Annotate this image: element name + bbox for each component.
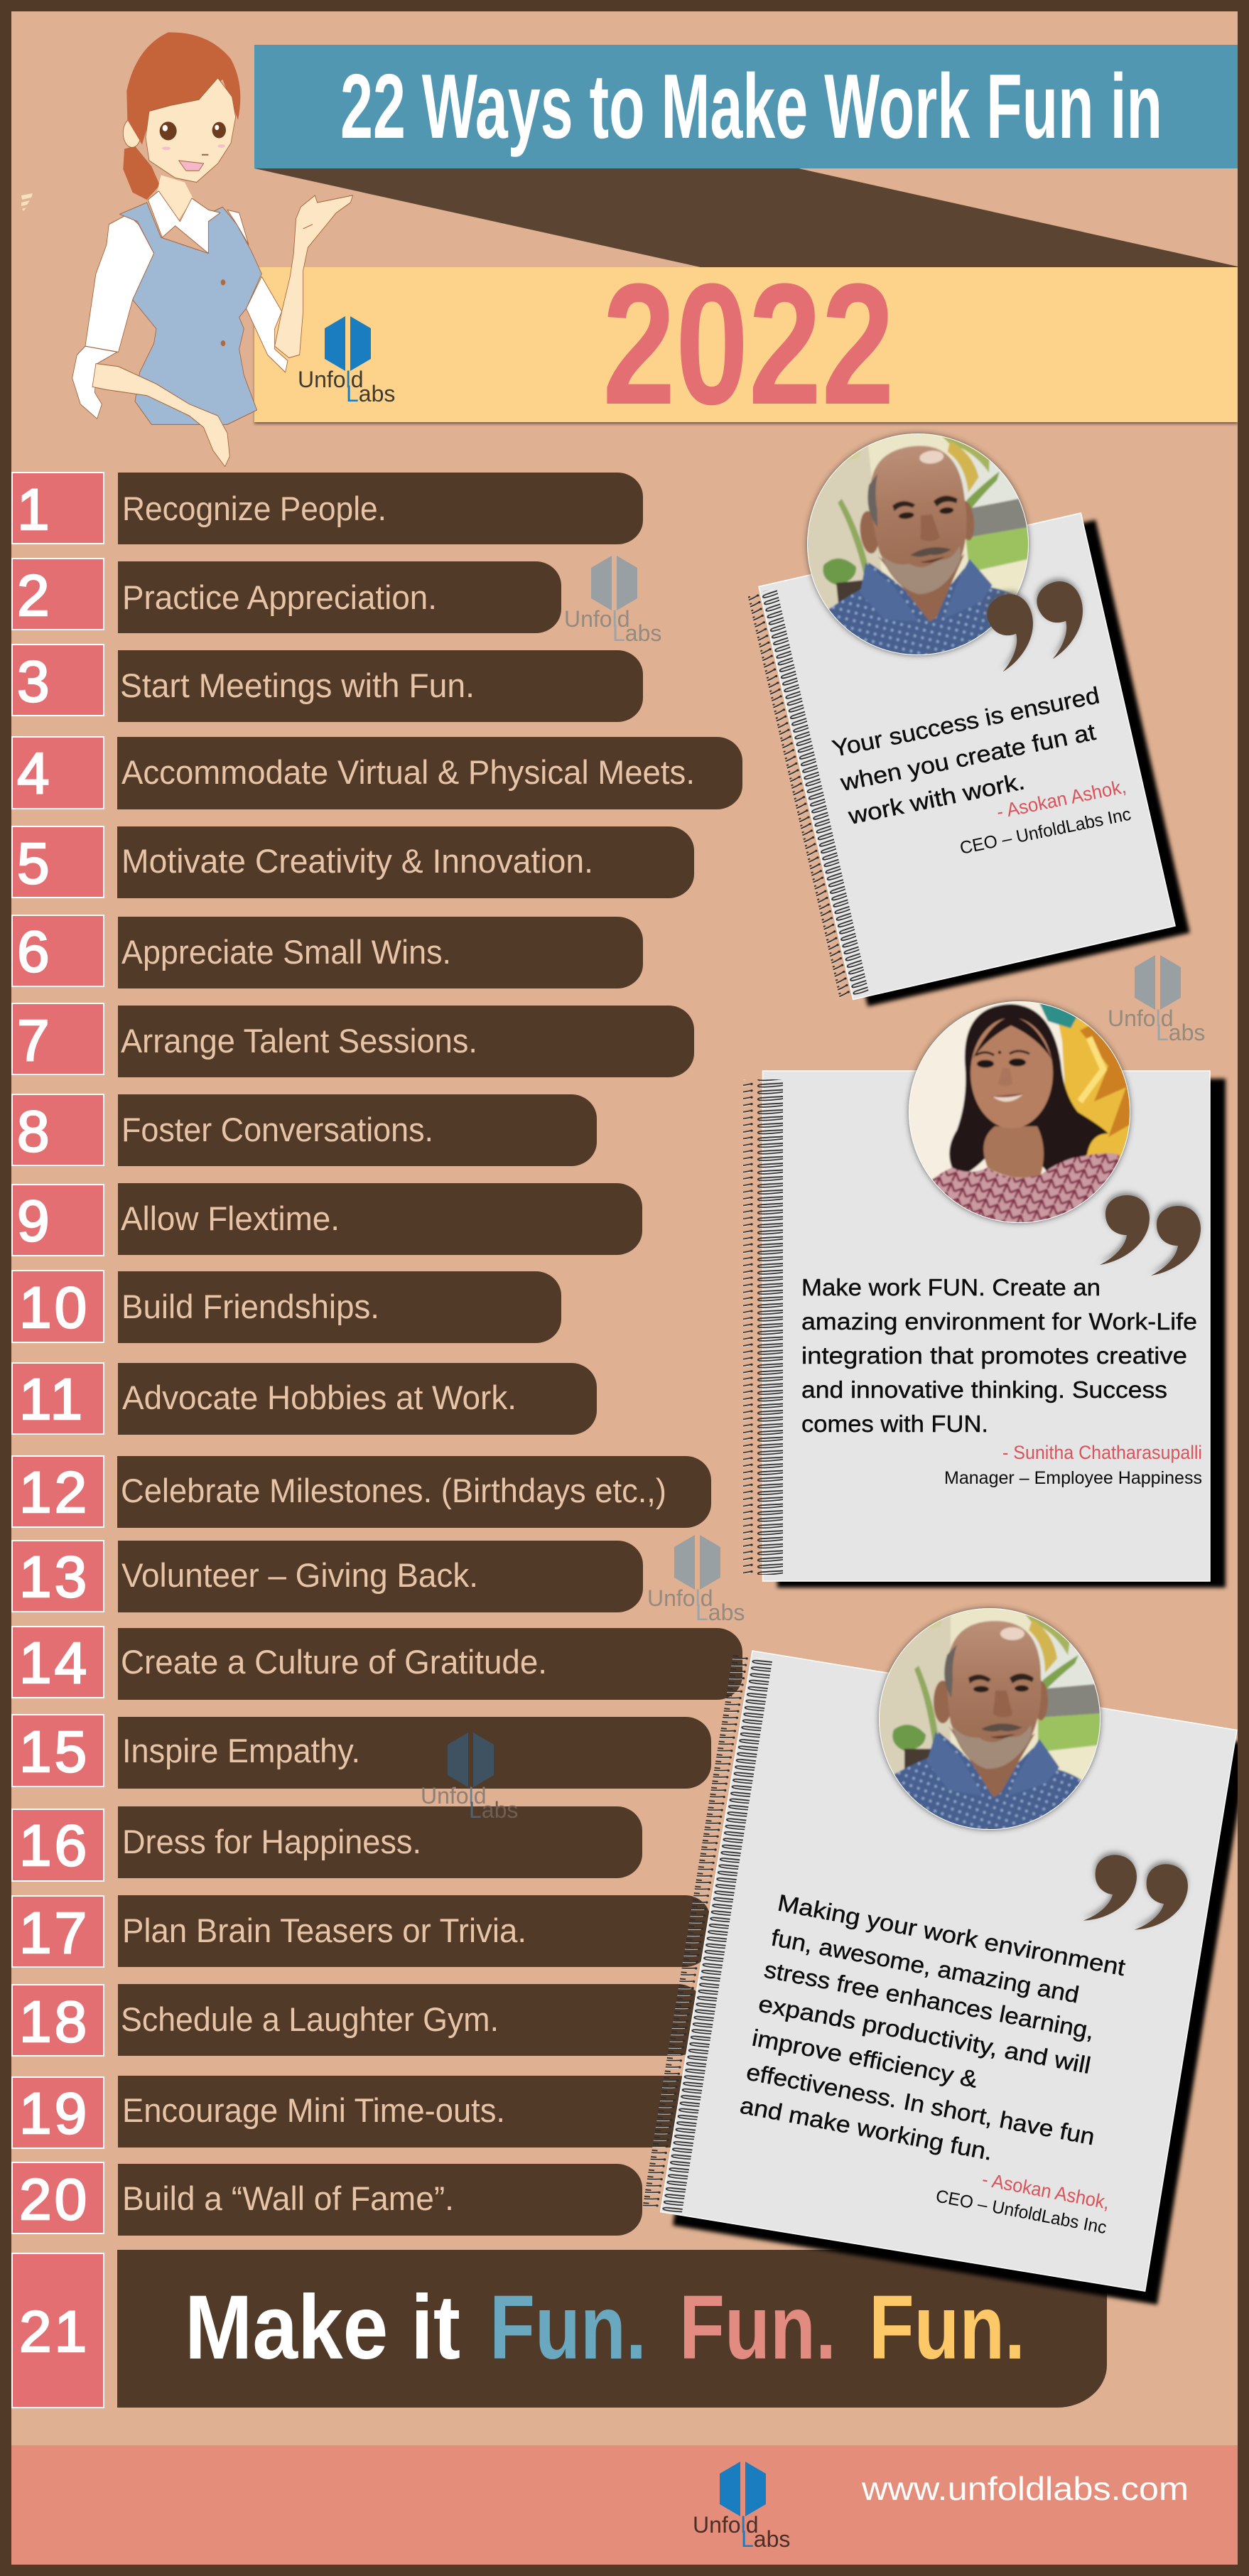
logo: header: Labs <box>346 381 395 406</box>
list item 20: 20 <box>19 2167 90 2232</box>
quote text: - Asokan Ashok, <box>995 776 1128 823</box>
notebook 1: Asokan quote <box>746 419 1190 1012</box>
logo: watermark beside item 2: Labs <box>612 620 661 646</box>
list item 21: make it fun: Fun. <box>679 2277 836 2378</box>
illustration: woman presenter <box>72 32 353 467</box>
list item 14: Create a Culture of Gratitude. <box>121 1643 547 1681</box>
list item 14: 14 <box>19 1631 90 1696</box>
quote text: work with work. <box>845 767 1027 829</box>
list item 7 <box>12 1003 694 1077</box>
list item 11: 11 <box>19 1367 85 1432</box>
list item 3 <box>12 645 643 722</box>
list item 12 <box>12 1456 711 1528</box>
website url: www.unfoldlabs.com <box>861 2470 1189 2507</box>
logo: header: Unfold <box>298 367 364 392</box>
list item 1: Recognize People. <box>122 490 386 527</box>
footer band <box>11 2445 1238 2565</box>
quote text: CEO – UnfoldLabs Inc <box>934 2186 1108 2238</box>
list item 19 <box>12 2076 703 2148</box>
quote text: improve efficiency & <box>750 2025 980 2093</box>
list item 16: 16 <box>19 1814 90 1878</box>
quote text: Making your work environment <box>776 1890 1128 1980</box>
list item 20: Build a “Wall of Fame”. <box>122 2179 454 2217</box>
list item 19: Encourage Mini Time-outs. <box>122 2091 505 2129</box>
list item 18: Schedule a Laughter Gym. <box>121 2000 499 2038</box>
quote text: stress free enhances learning, <box>762 1956 1096 2044</box>
list item 13 <box>12 1541 643 1612</box>
quote text <box>830 681 1132 858</box>
quote text: CEO – UnfoldLabs Inc <box>958 804 1132 858</box>
logo: watermark beside item 13: Unfold <box>647 1585 713 1611</box>
small artifact mark <box>21 193 33 211</box>
list item 2: 2 <box>17 564 50 628</box>
quote text: and innovative thinking. Success <box>801 1376 1167 1403</box>
list item 15: Inspire Empathy. <box>122 1732 360 1769</box>
quote text: - Asokan Ashok, <box>980 2168 1111 2214</box>
list item 16: Dress for Happiness. <box>122 1823 421 1860</box>
list item 21: make it fun: Fun. <box>869 2277 1025 2378</box>
list item 14 <box>12 1627 742 1700</box>
list item 17: 17 <box>19 1901 90 1966</box>
portrait: Asokan Ashok <box>803 429 1033 659</box>
list item 6 <box>12 915 643 988</box>
list item 20 <box>12 2162 642 2236</box>
list item 17 <box>12 1895 710 1967</box>
quote text: - Sunitha Chatharasupalli <box>1002 1442 1202 1463</box>
icon: quotation marks <box>1100 1195 1201 1276</box>
quote text: Manager – Employee Happiness <box>944 1468 1202 1488</box>
year banner <box>254 248 1238 441</box>
logo: watermark beside item 13: Labs <box>696 1600 745 1625</box>
banner fold <box>254 168 1238 267</box>
list item 18: 18 <box>19 1990 90 2054</box>
list item 10: 10 <box>19 1276 90 1340</box>
icon: quotation marks <box>976 575 1098 672</box>
logo: watermark beside item 2: Unfold <box>564 606 629 632</box>
list item 4: Accommodate Virtual & Physical Meets. <box>121 753 695 791</box>
list item 7: Arrange Talent Sessions. <box>121 1022 477 1060</box>
notebook 2: Sunitha quote <box>743 998 1226 1588</box>
logo: watermark over item 15: Labs <box>469 1797 518 1823</box>
quote text: amazing environment for Work-Life <box>801 1308 1197 1335</box>
logo: footer <box>693 2462 790 2552</box>
list item 12: 12 <box>19 1460 90 1525</box>
logo: footer: Labs <box>741 2526 790 2552</box>
list item 21: make it fun: Fun. <box>490 2277 647 2378</box>
list item 8: Foster Conversations. <box>121 1111 433 1148</box>
quote text: when you create fun at <box>838 718 1098 796</box>
list item 3: 3 <box>17 650 50 714</box>
quote text: expands productivity, and will <box>757 1990 1093 2079</box>
list item 9 <box>12 1183 642 1256</box>
logo: watermark beside item 2 <box>564 556 661 646</box>
icon: quotation marks <box>1083 1852 1191 1936</box>
logo: watermark beside item 13 <box>647 1535 745 1625</box>
logo: watermark beside notebook 1: Labs <box>1156 1020 1205 1045</box>
quote text: and make working fun. <box>738 2092 995 2165</box>
quote text: comes with FUN. <box>801 1411 988 1437</box>
list item 15: 15 <box>19 1720 90 1784</box>
logo: watermark over item 15: Unfold <box>421 1783 486 1809</box>
list item 6: 6 <box>17 920 50 984</box>
list item 5 <box>12 826 694 898</box>
quote text <box>801 1274 1202 1488</box>
quote text: effectiveness. In short, have fun <box>745 2059 1097 2150</box>
quote text <box>738 1890 1128 2238</box>
logo: header <box>298 316 395 406</box>
list item 11: Advocate Hobbies at Work. <box>122 1379 517 1416</box>
list item 5: Motivate Creativity & Innovation. <box>121 842 593 880</box>
list item 9: Allow Flextime. <box>121 1200 340 1237</box>
list item 11 <box>12 1363 597 1435</box>
list item 16 <box>12 1806 642 1881</box>
list item 15 <box>12 1715 711 1789</box>
year banner: 2022 <box>602 248 894 441</box>
list item 4 <box>12 737 742 809</box>
list item 19: 19 <box>19 2081 90 2146</box>
list item 12: Celebrate Milestones. (Birthdays etc.,) <box>121 1472 666 1509</box>
quote text: integration that promotes creative <box>801 1342 1187 1369</box>
list item 21: make it fun <box>12 2250 1107 2408</box>
list item 4: 4 <box>17 741 50 806</box>
list item 3: Start Meetings with Fun. <box>120 667 475 704</box>
logo: footer: Unfold <box>693 2512 759 2538</box>
list item 1: 1 <box>17 478 50 542</box>
list item 13: 13 <box>19 1545 90 1610</box>
logo: watermark beside notebook 1 <box>1108 955 1205 1045</box>
list item 17: Plan Brain Teasers or Trivia. <box>122 1912 526 1949</box>
quote text: Your success is ensured <box>830 681 1102 762</box>
list item 2 <box>12 559 561 633</box>
list item 13: Volunteer – Giving Back. <box>121 1556 478 1594</box>
list item 21: make it fun: 21 <box>19 2300 90 2364</box>
logo: watermark beside notebook 1: Unfold <box>1108 1006 1174 1031</box>
list item 18 <box>12 1984 703 2056</box>
list item 2: Practice Appreciation. <box>122 578 437 616</box>
list item 9: 9 <box>17 1189 50 1254</box>
quote text: Make work FUN. Create an <box>801 1274 1101 1300</box>
list item 7: 7 <box>17 1008 50 1073</box>
notebook 3: Asokan quote <box>640 1605 1249 2305</box>
list item 21: make it fun: Make it <box>185 2277 460 2378</box>
list item 5: 5 <box>17 831 50 896</box>
list item 10: Build Friendships. <box>121 1288 379 1325</box>
quote text: fun, awesome, amazing and <box>769 1924 1081 2008</box>
portrait: Sunitha Chatharasupalli <box>906 998 1133 1226</box>
list item 8 <box>12 1094 597 1166</box>
list item 1 <box>12 473 643 544</box>
portrait: Asokan Ashok <box>876 1605 1103 1833</box>
list item 10 <box>12 1271 561 1343</box>
list item 8: 8 <box>17 1099 50 1164</box>
list item 6: Appreciate Small Wins. <box>121 933 451 971</box>
logo: watermark over item 15 <box>421 1732 518 1823</box>
